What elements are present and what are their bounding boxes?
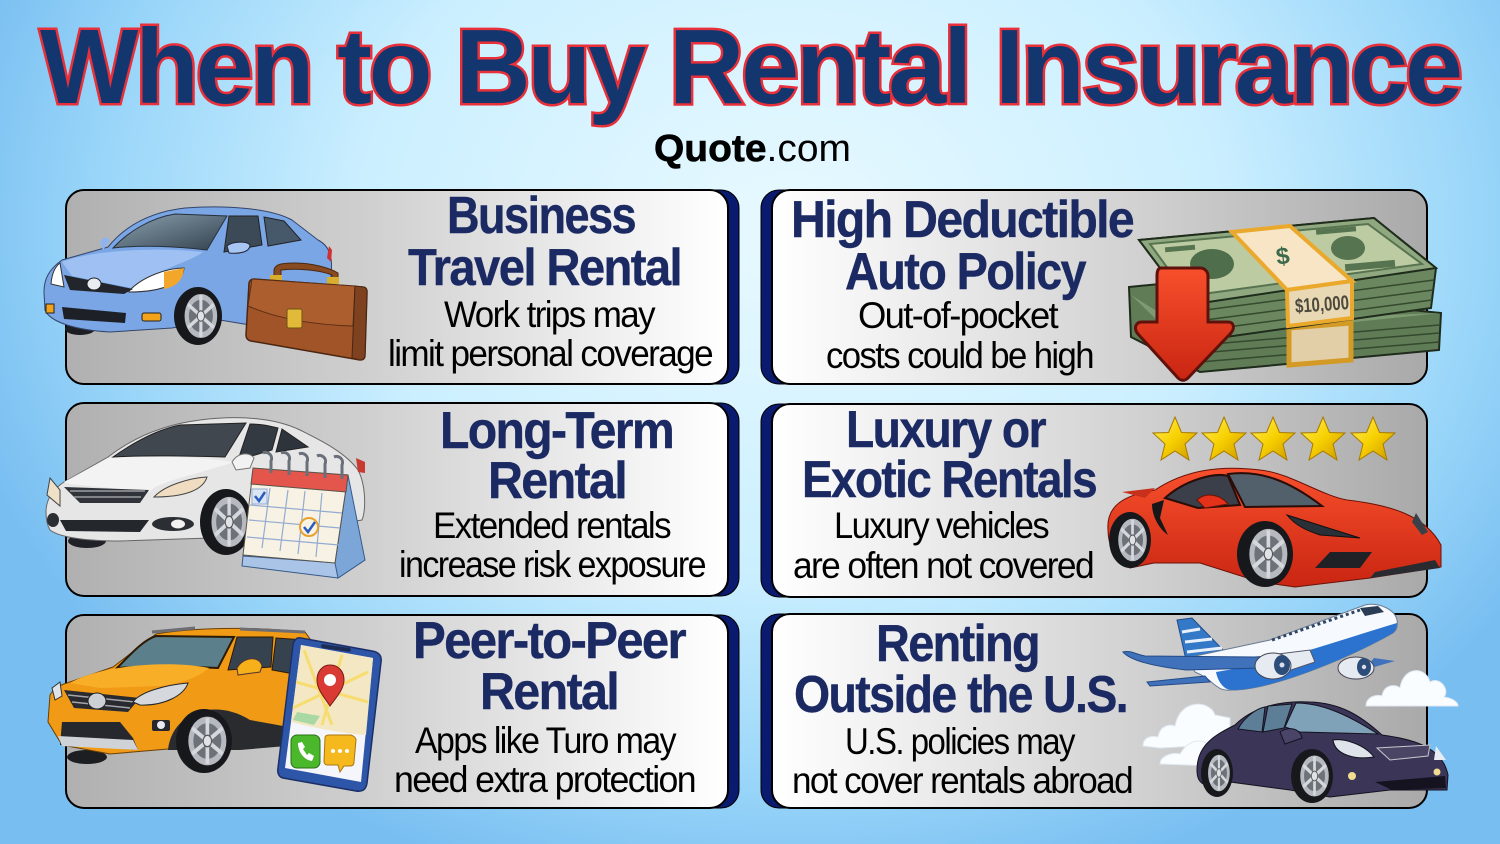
panel: renting outside the U.S.	[761, 604, 1458, 808]
icon: airplane	[1123, 604, 1397, 690]
heading: Luxury or	[846, 401, 1046, 459]
panel: high deductible auto policy	[761, 190, 1441, 384]
heading	[802, 401, 1096, 509]
heading: Rental	[488, 452, 626, 510]
heading: High Deductible	[791, 191, 1134, 249]
description: increase risk exposure	[399, 544, 705, 585]
panel: luxury or exotic rentals	[761, 401, 1441, 597]
description: Apps like Turo may	[415, 720, 677, 761]
description: U.S. policies may	[845, 721, 1076, 762]
heading: Renting	[876, 615, 1039, 673]
heading: Long-Term	[440, 402, 673, 460]
icon: white sedan	[46, 418, 365, 578]
description	[388, 294, 712, 374]
heading: Business	[447, 187, 635, 245]
heading	[791, 191, 1134, 301]
heading: Travel Rental	[408, 239, 681, 297]
heading	[440, 402, 673, 510]
panel: long-term rental	[46, 402, 739, 596]
heading: Auto Policy	[845, 243, 1087, 301]
heading: Peer-to-Peer	[413, 612, 686, 670]
description: Luxury vehicles	[834, 505, 1049, 546]
title: When to Buy Rental Insurance	[40, 8, 1460, 126]
description	[792, 721, 1132, 801]
description: Work trips may	[444, 294, 656, 335]
icon: clouds	[1143, 671, 1458, 766]
heading	[794, 615, 1127, 724]
icon: blue sedan	[44, 207, 367, 360]
icon: red down arrow	[1135, 268, 1233, 380]
description	[826, 295, 1093, 376]
icon: dark sedan	[1197, 702, 1448, 803]
description: limit personal coverage	[388, 333, 712, 374]
description	[394, 720, 695, 800]
icon: orange SUV	[48, 628, 322, 773]
icon: smartphone with map	[278, 638, 381, 791]
heading	[413, 612, 686, 721]
band label: amount: $10,000	[1294, 292, 1350, 318]
heading	[408, 187, 681, 297]
band label: dollar sign: $	[1274, 242, 1292, 271]
description	[399, 505, 705, 585]
panel: peer-to-peer rental	[48, 612, 739, 808]
logo: Quote.com: Quote.com	[654, 128, 851, 170]
description: Out-of-pocket	[858, 295, 1059, 336]
description	[793, 505, 1093, 586]
description: are often not covered	[793, 545, 1093, 586]
heading: Outside the U.S.	[794, 666, 1127, 724]
description: costs could be high	[826, 335, 1093, 376]
icon: red sports car	[1108, 468, 1441, 587]
heading: Rental	[480, 663, 618, 721]
description: not cover rentals abroad	[792, 760, 1132, 801]
description: Extended rentals	[433, 505, 671, 546]
heading: Exotic Rentals	[802, 451, 1096, 509]
icon: five gold stars	[1153, 417, 1395, 460]
panel: business travel rental	[44, 187, 739, 384]
description: need extra protection	[394, 759, 695, 800]
icon: cash stacks with down arrow	[1129, 218, 1441, 380]
